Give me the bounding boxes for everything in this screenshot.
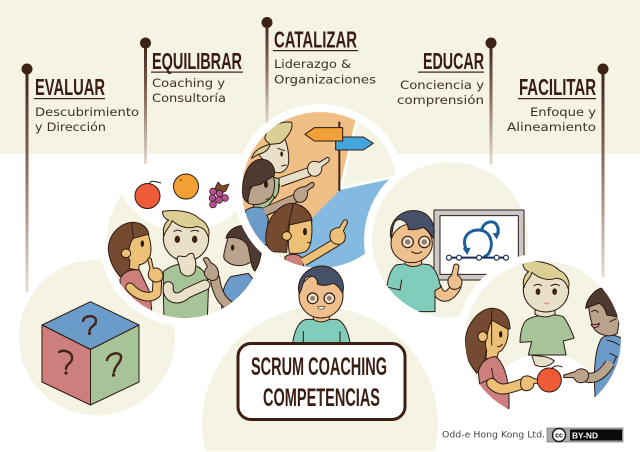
heading: facilitar: FACILITAR [519, 74, 596, 100]
text: facilitar description: Alineamiento [507, 120, 596, 134]
title box [238, 344, 405, 420]
icon: signpost [305, 122, 373, 191]
pole: evaluar [22, 64, 32, 292]
text: educar description [397, 78, 484, 107]
icon: question mark cube [42, 302, 139, 405]
person: girl touching apple [465, 308, 544, 408]
panel: evaluar cube circle [19, 260, 175, 416]
icon: apple held [537, 366, 562, 392]
person: smiling boy pointing [564, 288, 623, 402]
heading: catalizar: CATALIZAR [274, 26, 357, 52]
credit text: Odd-e Hong Kong Ltd. [442, 430, 545, 440]
title box: COMPETENCIAS [263, 384, 380, 412]
heading: equilibrar [151, 48, 243, 74]
badge: cc by-nd licence: cc [555, 432, 563, 440]
person: blond boy facing apple [520, 261, 574, 367]
text: facilitar description: Enfoque y [530, 105, 596, 119]
panel: catalizar circle [236, 104, 398, 268]
pole: equilibrar [140, 38, 151, 167]
text: catalizar description [274, 57, 376, 86]
text: equilibrar description: Coaching y [152, 76, 225, 90]
text: evaluar description: Descubrimiento [35, 105, 139, 119]
text: educar description: Conciencia y [400, 78, 484, 92]
badge: cc by-nd licence: BY-ND [572, 430, 598, 440]
sector: blue wedge [286, 179, 390, 268]
badge: cc by-nd licence [547, 428, 623, 442]
pole: educar [486, 38, 496, 166]
icon: orange [174, 174, 198, 199]
person: girl thinking [108, 222, 163, 313]
heading: catalizar [273, 26, 358, 52]
icon: whiteboard with scrum loop [434, 210, 524, 280]
pole: facilitar [598, 64, 608, 280]
person: dark-haired boy thinking [203, 226, 261, 320]
text: catalizar description: Organizaciones [274, 72, 376, 86]
text: catalizar description: Liderazgo & [274, 57, 351, 71]
text: equilibrar description [152, 76, 226, 105]
person: coach at whiteboard [387, 211, 462, 312]
text: evaluar description [35, 105, 139, 134]
pole: catalizar [262, 17, 272, 127]
text: facilitar description [507, 105, 596, 134]
panel: facilitar circle [460, 254, 621, 409]
panel: educar circle [364, 162, 528, 318]
heading: educar [418, 48, 484, 74]
title box: SCRUM COACHING [251, 353, 387, 381]
text: evaluar description: y Dirección [35, 120, 106, 134]
person: blond boy pointing [250, 122, 329, 215]
panel: equilibrar circle [102, 163, 262, 326]
text: educar description: comprensión [397, 93, 484, 107]
person: girl pointing [266, 203, 347, 270]
person: blond boy thinking [163, 211, 209, 318]
heading: equilibrar: EQUILIBRAR [152, 48, 242, 74]
icon: grapes [209, 182, 229, 208]
heading: evaluar [34, 74, 105, 100]
person: dark boy pointing [242, 159, 314, 245]
icon: apple [135, 181, 161, 208]
person: central coach [293, 266, 350, 343]
sector: orange wedge [242, 112, 357, 250]
top cream band [0, 0, 640, 154]
panel: central circle [202, 266, 438, 451]
heading: educar: EDUCAR [423, 48, 484, 74]
heading: evaluar: EVALUAR [35, 74, 105, 100]
text: equilibrar description: Consultoría [152, 91, 226, 105]
heading: facilitar [518, 74, 596, 100]
